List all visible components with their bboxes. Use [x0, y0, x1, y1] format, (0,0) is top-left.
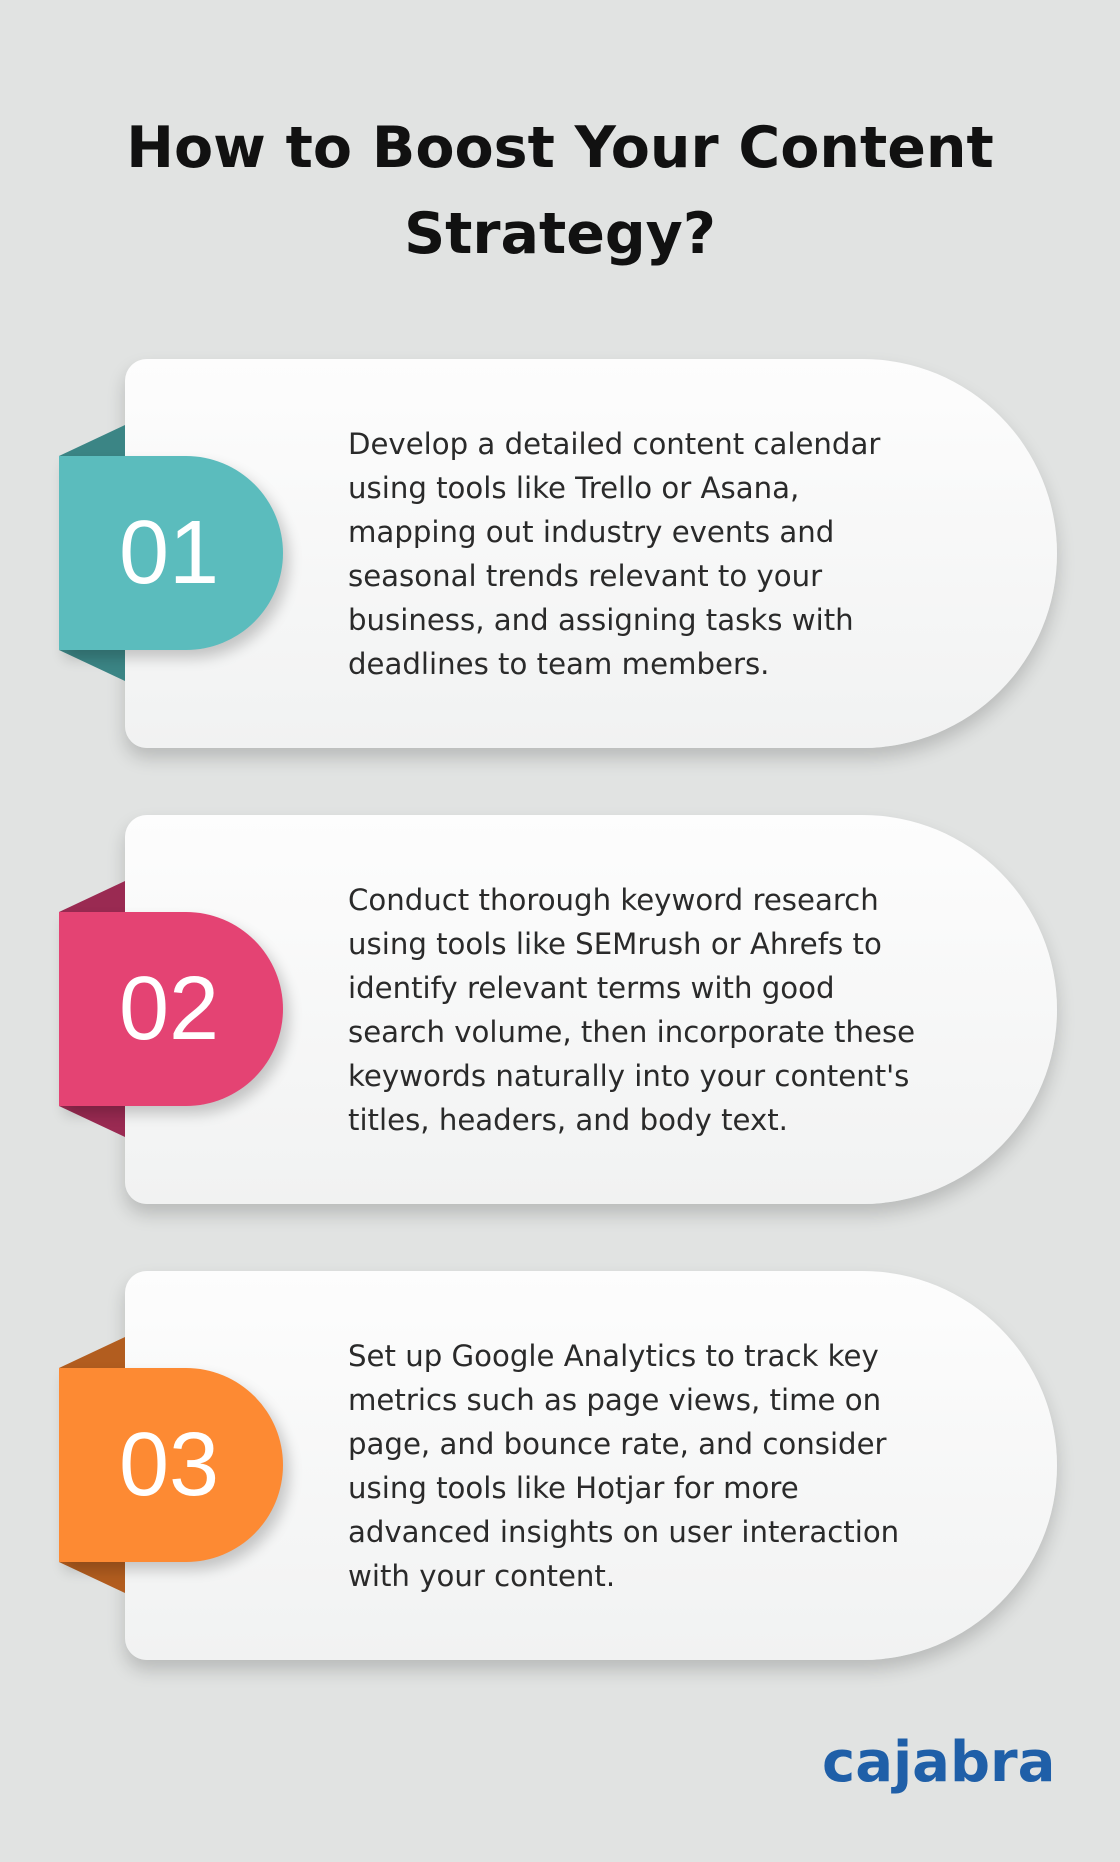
text: step 1: deadlines to team members.: [348, 647, 769, 681]
text: step 2: using tools like SEMrush or Ahrefs to: [348, 927, 882, 961]
number tab 02: [59, 912, 283, 1106]
text: step 3: with your content.: [348, 1559, 615, 1593]
number tab 02: 02: [119, 959, 219, 1059]
text: step 2: identify relevant terms with good: [348, 971, 834, 1005]
text: step 2: titles, headers, and body text.: [348, 1103, 788, 1137]
logo: cajabra: [822, 1730, 1055, 1795]
text: step 1: seasonal trends relevant to your: [348, 559, 822, 593]
text: step 2: search volume, then incorporate these: [348, 1015, 915, 1049]
text: step 1: business, and assigning tasks with: [348, 603, 854, 637]
text: step 3: metrics such as page views, time on: [348, 1383, 881, 1417]
text: step 1: mapping out industry events and: [348, 515, 834, 549]
text: step 2: [348, 883, 915, 1137]
panel: step 2 card: [125, 815, 1057, 1204]
text: step 3: Set up Google Analytics to track key: [348, 1339, 879, 1373]
text: step 1: using tools like Trello or Asana,: [348, 471, 799, 505]
text: step 1: Develop a detailed content calendar: [348, 427, 880, 461]
text: step 3: [348, 1339, 899, 1593]
fold: step 1 bottom: [59, 650, 125, 681]
text: step 3: page, and bounce rate, and consider: [348, 1427, 887, 1461]
number tab 03: [59, 1368, 283, 1562]
panel: step 3 card: [125, 1271, 1057, 1660]
title: How to Boost Your Content: [126, 115, 994, 181]
fold: step 1 top: [59, 425, 125, 456]
fold: step 2 bottom: [59, 1106, 125, 1137]
panel: step 1 card: [125, 359, 1057, 748]
number tab 01: [59, 456, 283, 650]
text: step 2: Conduct thorough keyword research: [348, 883, 879, 917]
title: [126, 115, 994, 267]
number tab 03: 03: [119, 1415, 219, 1515]
text: step 3: advanced insights on user interaction: [348, 1515, 899, 1549]
text: step 2: keywords naturally into your content's: [348, 1059, 909, 1093]
fold: step 3 bottom: [59, 1562, 125, 1593]
text: step 1: [348, 427, 880, 681]
fold: step 3 top: [59, 1337, 125, 1368]
text: step 3: using tools like Hotjar for more: [348, 1471, 799, 1505]
fold: step 2 top: [59, 881, 125, 912]
title: Strategy?: [404, 201, 716, 267]
number tab 01: 01: [119, 503, 219, 603]
